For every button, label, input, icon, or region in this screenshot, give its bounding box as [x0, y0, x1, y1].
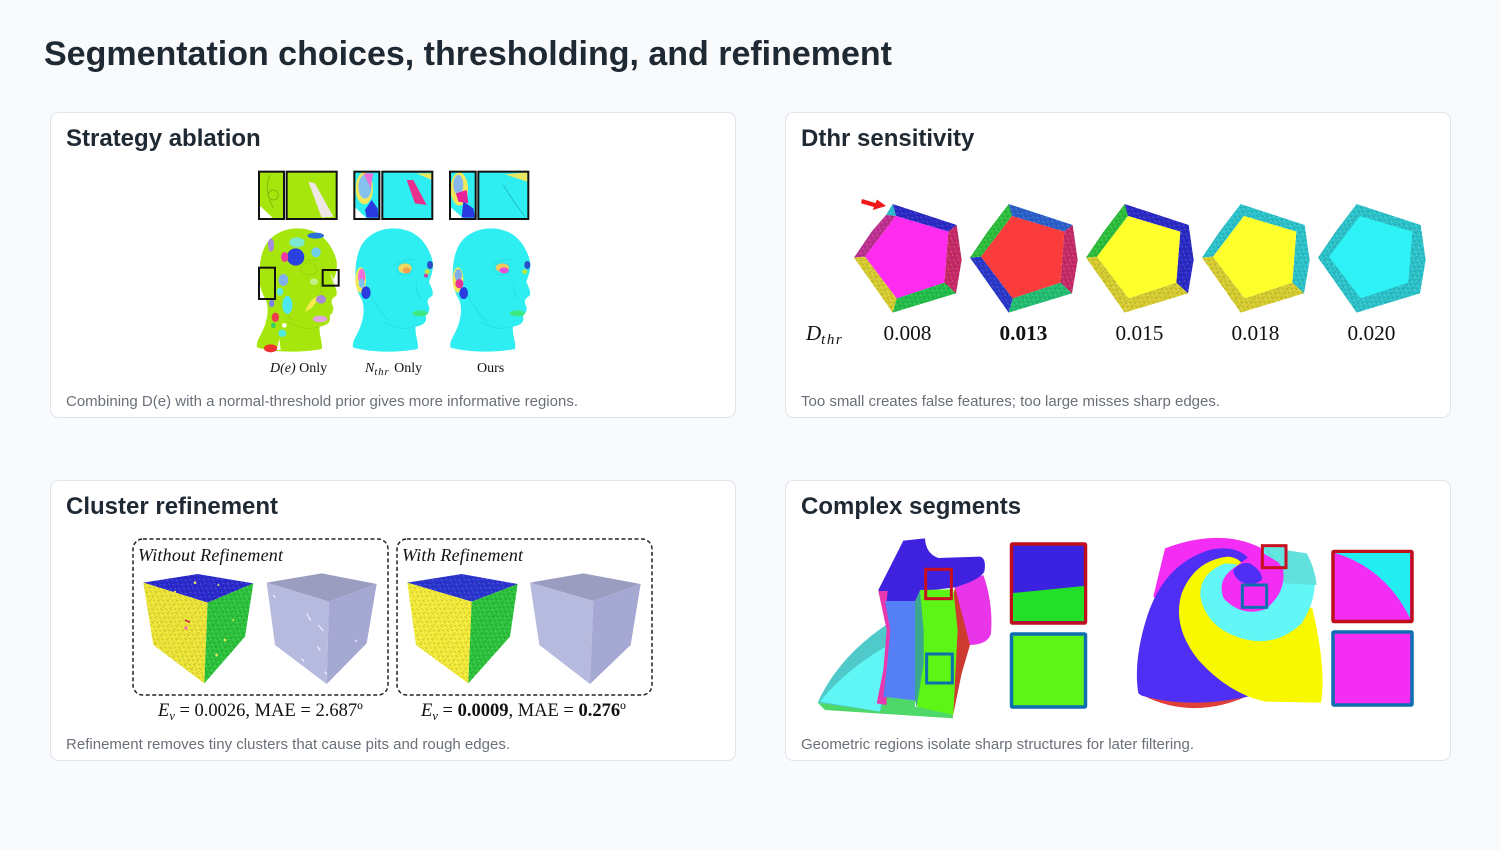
metric: without refinement: = 0.0026, MAE = 2.687º: [175, 701, 363, 721]
value: 0.015: 0.015: [1116, 321, 1163, 345]
value: 0.018: 0.018: [1232, 321, 1279, 345]
label: N_thr only: Only: [391, 361, 422, 376]
heading: strategy ablation: Strategy ablation: [66, 125, 261, 152]
shape: spiral part: [1137, 538, 1323, 708]
cube: smooth normal render: [530, 573, 641, 684]
group: with refinement: [397, 539, 652, 695]
metric: without refinement: E: [157, 701, 169, 721]
cube: rough normal render: [267, 573, 377, 684]
head: ours: [450, 228, 530, 352]
heading: cluster refinement: Cluster refinement: [66, 493, 278, 520]
dodecahedron: 0.020: [1318, 204, 1426, 313]
metric: without refinement: v: [169, 709, 175, 723]
heading: complex segments: Complex segments: [801, 493, 1021, 520]
value: 0.020: 0.020: [1348, 321, 1395, 345]
cube: segmented rough: [143, 574, 253, 683]
inset: blue flat crop: [1333, 632, 1412, 705]
head: N_thr only: [353, 228, 433, 352]
inset: blue flat crop: [1012, 634, 1086, 707]
arrow: red pointer: [861, 199, 886, 210]
figure: dodecahedra threshold series: [805, 199, 1426, 348]
cube: segmented clean: [407, 574, 518, 683]
panel: complex segments: [786, 480, 1450, 760]
value: 0.008: 0.008: [884, 321, 931, 345]
metric: with refinement: E: [420, 701, 432, 721]
dodecahedron: 0.018: [1202, 204, 1310, 313]
label: N_thr only: N: [364, 361, 375, 376]
caption: Dthr sensitivity: Too small creates false features; too large misses sharp edges.: [801, 393, 1220, 410]
head: D(e) only: [257, 228, 339, 352]
label: D_thr axis: thr: [821, 332, 843, 348]
inset: red boundary crop: [1012, 544, 1086, 623]
metric: with refinement: 0.0009, MAE = 0.276º: [458, 701, 626, 721]
caption: complex segments: Geometric regions isolate sharp structures for later filtering.: [801, 736, 1194, 753]
caption: strategy ablation: Combining D(e) with a normal-threshold prior gives more informative regions.: [66, 393, 578, 410]
figure: head comparison: [257, 172, 530, 378]
dodecahedron: 0.013: [970, 204, 1078, 313]
inset crops: top row: [259, 172, 528, 219]
value: 0.013: 0.013: [1000, 321, 1047, 345]
metric: with refinement: v: [432, 709, 438, 723]
inset: red boundary crop: [1333, 552, 1412, 622]
group: without refinement: [133, 539, 388, 695]
label: N_thr only: thr: [374, 367, 390, 378]
dodecahedron: 0.008: [854, 204, 962, 313]
label: D(e) only: D(e) Only: [269, 361, 327, 376]
caption: cluster refinement: Refinement removes tiny clusters that cause pits and rough edges.: [66, 736, 510, 753]
title: Segmentation choices, thresholding, and refinement: [44, 35, 892, 73]
panel: strategy ablation: [50, 112, 736, 418]
label: with refinement: With Refinement: [402, 545, 524, 565]
panel: cluster refinement: [50, 480, 736, 760]
panel: Dthr sensitivity: [786, 112, 1450, 418]
label: without refinement: Without Refinement: [138, 545, 284, 565]
shape: carved part: [818, 538, 991, 718]
label: ours: Ours: [477, 361, 504, 376]
dodecahedron: 0.015: [1086, 204, 1194, 313]
heading: Dthr sensitivity: Dthr sensitivity: [801, 125, 975, 152]
label: D_thr axis: D: [806, 321, 821, 345]
metric: with refinement: =: [438, 701, 458, 721]
